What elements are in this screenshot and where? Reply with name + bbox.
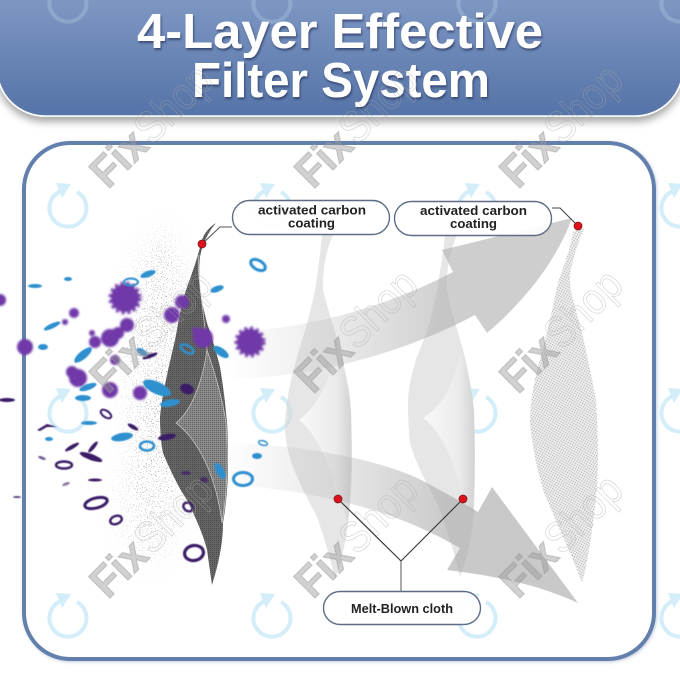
particles: purple viruses [0,283,264,400]
callout: activated carbon coating right: coating [450,217,497,231]
title [137,5,543,108]
watermark: FixShop text: Fix [285,120,363,197]
callout: melt-blown cloth: Melt-Blown cloth [351,602,453,616]
layer 2: melt-blown cloth [285,235,352,580]
red marker dots [198,222,582,503]
watermark: FixShop text: Fix [285,325,363,402]
watermark: FixShop text: Shop [329,465,428,563]
title: Filter System [192,54,490,108]
connector lines [202,208,578,591]
callout: activated carbon coating right [394,202,552,236]
watermark: FixShop text: Shop [124,55,223,153]
watermark: FixShop text [80,55,633,607]
header banner [0,0,680,116]
watermark: FixShop text: Fix [80,325,158,402]
layer 4: activated carbon coating [530,228,598,583]
callout: activated carbon coating left [232,200,390,234]
watermark: FixShop text: Shop [329,260,428,358]
watermark: FixShop text: Fix [80,530,158,607]
panel: main white frame [24,143,654,659]
callout: melt-blown cloth [324,592,480,624]
watermark: FixShop text: Shop [534,260,633,358]
title: 4-Layer Effective [137,5,543,59]
watermark: FixShop text: Fix [80,120,158,197]
watermark: FixShop text: Shop [534,465,633,563]
layer 3: melt-blown cloth [408,235,475,577]
arrow: top flow [225,218,572,379]
callout: activated carbon coating right: activated carbon [420,204,527,218]
layer 1: outer mask [160,223,228,585]
watermark: FixShop text: Fix [490,530,568,607]
watermark: FixShop text: Fix [490,325,568,402]
watermark: FixShop text: Shop [124,260,223,358]
particles: dark purple rings [56,408,205,562]
watermark: FixShop text: Fix [490,120,568,197]
watermark: FixShop text: Fix [285,530,363,607]
watermark: FixShop text: Shop [534,55,633,153]
particles: blue rings [124,257,268,486]
watermark: FixShop text: Shop [329,55,428,153]
watermark: FixShop text: Shop [124,465,223,563]
dust spray cloud [50,180,250,660]
arrow: bottom flow [220,442,578,603]
particles: dark purple [0,351,208,498]
particles: blue [28,268,262,481]
callout: activated carbon coating left: coating [288,216,335,230]
callout: activated carbon coating left: activated carbon [258,204,366,218]
